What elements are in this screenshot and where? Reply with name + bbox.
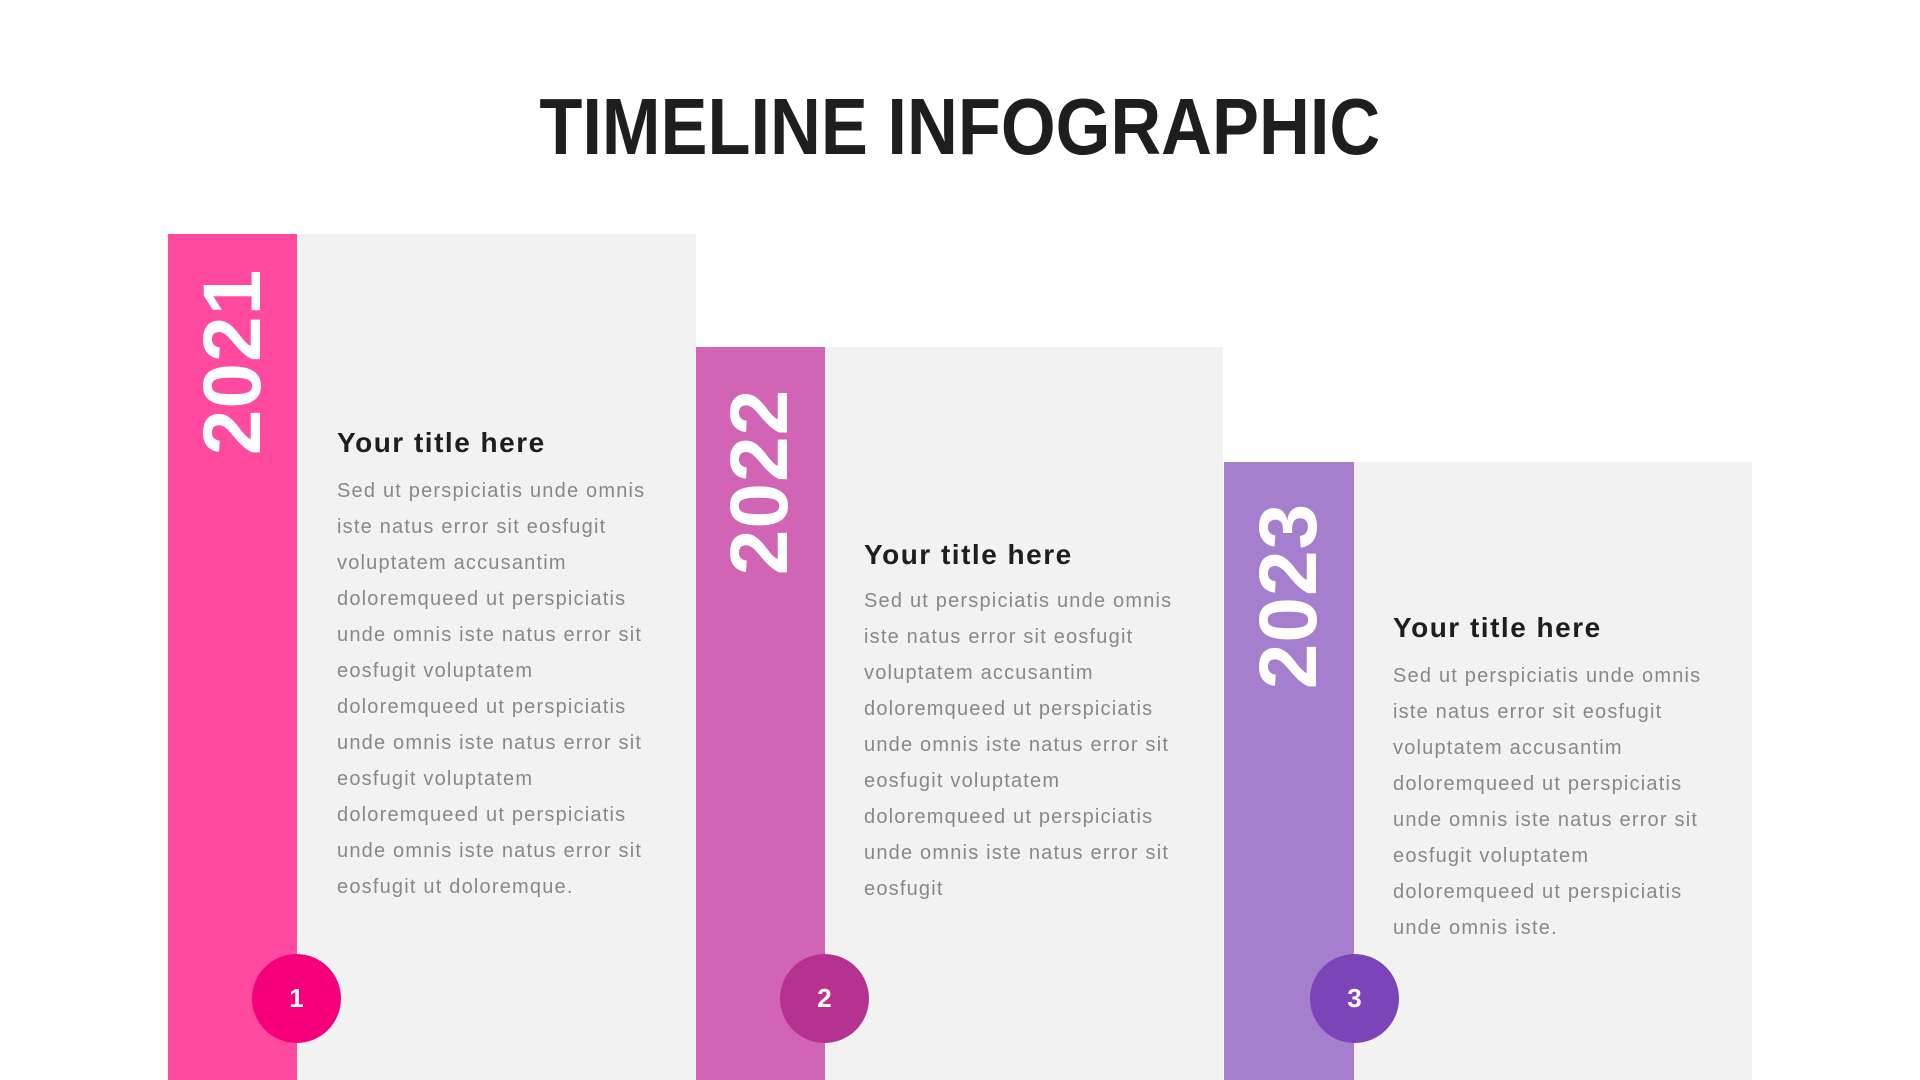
- text block 2: doloremqueed ut perspiciatis: [864, 698, 1153, 720]
- heading 1: Your title here: [337, 427, 546, 458]
- year strip 2021: [168, 234, 297, 1080]
- text block 2: eosfugit: [864, 878, 944, 900]
- text block 3: voluptatem accusantim: [1393, 737, 1623, 759]
- text block 3: Sed ut perspiciatis unde omnis: [1393, 665, 1701, 687]
- year strip 2022: [696, 347, 825, 1080]
- panel: 2022: [696, 347, 1223, 1080]
- text block 1: eosfugit voluptatem: [337, 768, 533, 790]
- text block 2: doloremqueed ut perspiciatis: [864, 806, 1153, 828]
- text block 2: Sed ut perspiciatis unde omnis: [864, 590, 1172, 612]
- text block 3: eosfugit voluptatem: [1393, 845, 1589, 867]
- year label 2021: 2021: [187, 269, 278, 455]
- text block 3: [1393, 665, 1701, 939]
- text block 3: unde omnis iste natus error sit: [1393, 809, 1698, 831]
- heading 2: Your title here: [864, 539, 1073, 570]
- circle badge 2: 2: [817, 983, 832, 1013]
- text block 3: iste natus error sit eosfugit: [1393, 701, 1662, 723]
- panel: 2023: [1224, 462, 1752, 1080]
- text block 1: unde omnis iste natus error sit: [337, 840, 642, 862]
- text block 2: voluptatem accusantim: [864, 662, 1094, 684]
- text block 1: iste natus error sit eosfugit: [337, 516, 606, 538]
- text block 1: eosfugit voluptatem: [337, 660, 533, 682]
- year label 2022: 2022: [714, 389, 805, 575]
- text block 2: unde omnis iste natus error sit: [864, 842, 1169, 864]
- text block 1: eosfugit ut doloremque.: [337, 876, 574, 898]
- text block 2: unde omnis iste natus error sit: [864, 734, 1169, 756]
- heading 3: Your title here: [1393, 612, 1602, 643]
- circle badge 3: 3: [1347, 983, 1362, 1013]
- text block 1: doloremqueed ut perspiciatis: [337, 804, 626, 826]
- panel: 2021: [168, 234, 696, 1080]
- text block 1: unde omnis iste natus error sit: [337, 624, 642, 646]
- circle badge 3: [1310, 954, 1399, 1043]
- text block 1: unde omnis iste natus error sit: [337, 732, 642, 754]
- text block 3: doloremqueed ut perspiciatis: [1393, 881, 1682, 903]
- text block 2: [864, 590, 1172, 900]
- text block 1: [337, 480, 645, 898]
- text block 3: doloremqueed ut perspiciatis: [1393, 773, 1682, 795]
- text block 1: doloremqueed ut perspiciatis: [337, 588, 626, 610]
- text block 2: eosfugit voluptatem: [864, 770, 1060, 792]
- circle badge 1: [252, 954, 341, 1043]
- circle badge 1: 1: [289, 983, 304, 1013]
- text block 1: voluptatem accusantim: [337, 552, 567, 574]
- year label 2023: 2023: [1243, 503, 1334, 689]
- text block 3: unde omnis iste.: [1393, 917, 1558, 939]
- title: TIMELINE INFOGRAPHIC: [540, 82, 1380, 171]
- year strip 2023: [1224, 462, 1354, 1080]
- text block 1: Sed ut perspiciatis unde omnis: [337, 480, 645, 502]
- circle badge 2: [780, 954, 869, 1043]
- text block 2: iste natus error sit eosfugit: [864, 626, 1133, 648]
- text block 1: doloremqueed ut perspiciatis: [337, 696, 626, 718]
